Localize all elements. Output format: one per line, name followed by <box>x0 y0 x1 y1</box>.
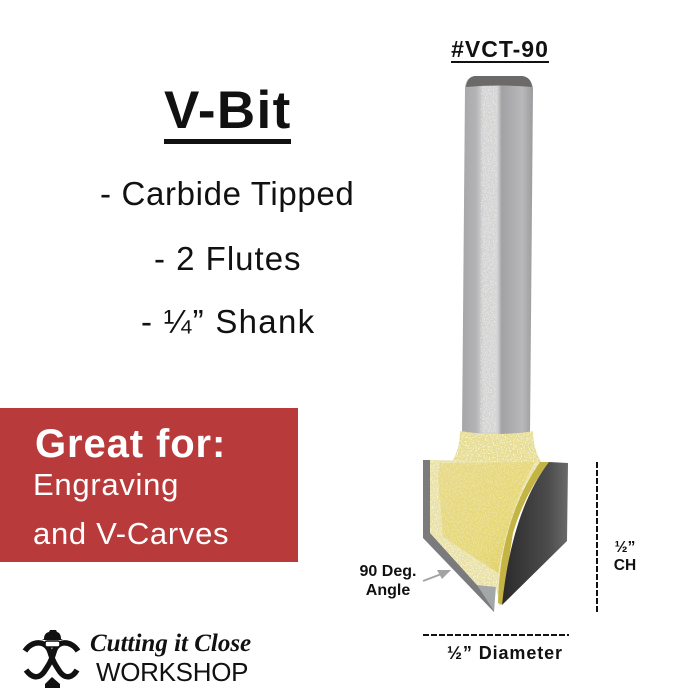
carbide left <box>423 460 495 612</box>
heading: great for: Great for: <box>35 422 226 466</box>
flute band <box>498 462 549 605</box>
feature: 2 flutes: - 2 Flutes <box>154 240 302 277</box>
dimension: height <box>596 462 598 612</box>
shank <box>462 76 533 435</box>
label: diameter: ½” Diameter <box>447 643 563 663</box>
text: and v-carves: and V-Carves <box>33 516 229 551</box>
title: V-Bit: V-Bit <box>164 81 292 140</box>
carbide right <box>502 462 568 605</box>
feature: carbide tipped: - Carbide Tipped <box>100 175 354 212</box>
text: engraving: Engraving <box>33 467 179 502</box>
label: ch: CH <box>614 557 636 574</box>
arrow: angle <box>423 570 451 581</box>
label: angle: 90 Deg. <box>360 563 416 580</box>
dimension: diameter <box>423 634 569 636</box>
panel: great for <box>0 408 298 562</box>
yellow body <box>430 460 541 607</box>
label: angle <box>360 563 416 599</box>
logo script: Cutting it Close <box>90 630 251 657</box>
collar <box>452 431 541 462</box>
logo wordmark: WORKSHOP <box>96 657 248 687</box>
label: ch <box>614 539 636 574</box>
part number: #VCT-90 <box>451 36 549 62</box>
label: angle: Angle <box>366 582 410 599</box>
tip facet <box>477 585 496 611</box>
logo mark <box>22 630 80 688</box>
feature: shank size: - ¼” Shank <box>141 303 315 340</box>
logo <box>22 630 251 688</box>
label: ch: ½” <box>615 539 635 556</box>
